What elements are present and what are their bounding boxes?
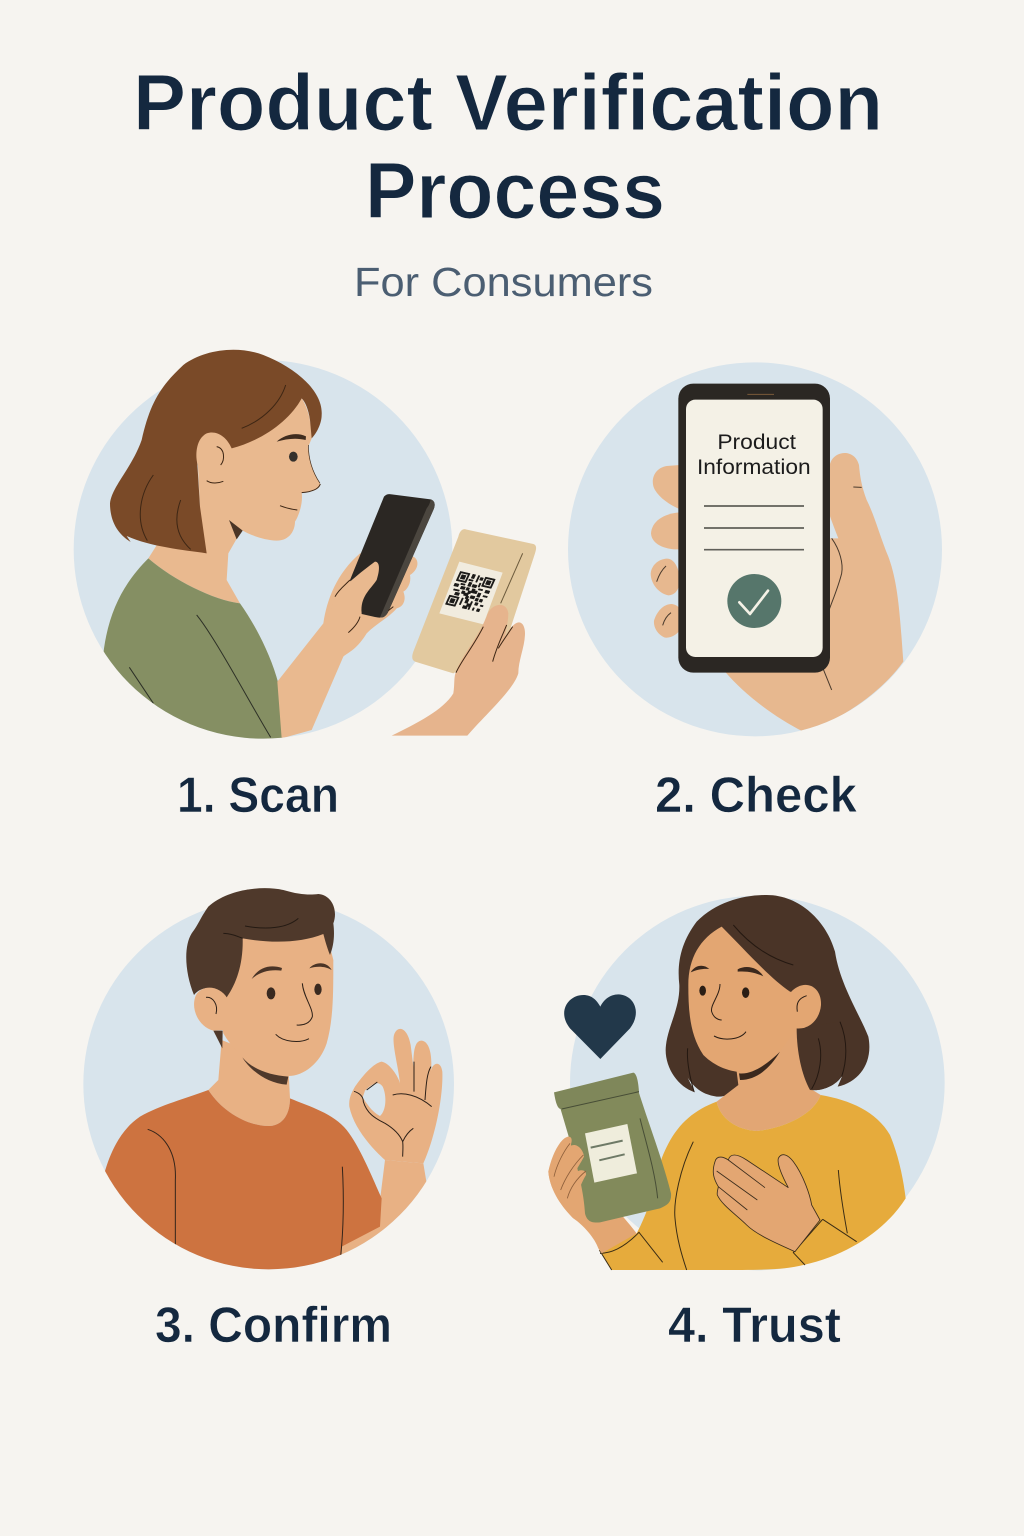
speaker	[747, 393, 774, 396]
product bag	[554, 1073, 671, 1223]
phone	[350, 494, 435, 618]
check badge	[727, 574, 781, 628]
holding hand	[392, 605, 525, 736]
illustration: hand holding phone	[568, 362, 942, 736]
screen heading: Information	[697, 456, 811, 479]
QR label	[439, 562, 503, 624]
phone body	[678, 384, 830, 673]
ear	[791, 985, 821, 1028]
chin shadow	[229, 520, 243, 539]
holding fingers	[548, 1137, 586, 1218]
screen heading	[697, 431, 811, 479]
illustration: woman holding product bag	[548, 895, 945, 1270]
background circle	[568, 362, 942, 736]
hair strands over neck	[797, 1022, 846, 1090]
forearm and hand	[277, 553, 417, 738]
subtitle: For Consumers	[354, 259, 653, 305]
ear	[196, 432, 232, 482]
neck	[208, 1040, 290, 1126]
t-shirt	[100, 1090, 382, 1280]
title: Process	[365, 146, 665, 235]
screen	[686, 400, 823, 657]
hair	[186, 888, 335, 997]
left fingers	[651, 465, 683, 638]
woman's neck and face	[148, 398, 320, 603]
step 3 label: 3. Confirm	[155, 1297, 392, 1353]
face features	[252, 963, 332, 1041]
background circle	[83, 899, 454, 1269]
step 4 label: 4. Trust	[668, 1297, 841, 1353]
chin shadow	[242, 1057, 288, 1085]
face details	[277, 434, 320, 510]
shirt seams	[129, 615, 271, 737]
title: Product Verification	[133, 58, 883, 147]
panel: step 2 check	[568, 362, 942, 736]
neck shadow	[213, 1031, 223, 1048]
left hand	[548, 1137, 637, 1253]
screen heading: Product	[717, 431, 796, 454]
illustration: woman scanning a QR code	[74, 350, 536, 743]
bag label	[585, 1124, 637, 1183]
shirt seams	[148, 1129, 343, 1257]
face features	[691, 966, 763, 1039]
step 2 label: 2. Check	[655, 767, 857, 823]
background circle	[74, 360, 452, 739]
hair strands	[140, 385, 286, 549]
sweater	[599, 1095, 906, 1270]
illustration: man making OK gesture	[83, 888, 454, 1280]
title	[133, 58, 883, 235]
finger creases	[657, 487, 862, 690]
arm	[332, 1160, 426, 1258]
OK hand	[349, 1029, 442, 1163]
face	[217, 933, 333, 1076]
face	[688, 927, 797, 1072]
background circle	[570, 896, 945, 1270]
thumb	[327, 562, 379, 633]
hand creases	[354, 1062, 432, 1157]
hand on chest	[713, 1155, 820, 1252]
screen lines	[704, 506, 804, 550]
hair	[110, 350, 322, 553]
ear	[194, 988, 227, 1031]
shirt	[93, 558, 283, 743]
panel: step 4 trust	[548, 895, 945, 1270]
hair	[666, 895, 869, 1097]
hair part line	[733, 925, 793, 965]
QR code	[445, 571, 495, 612]
heart	[564, 994, 636, 1059]
panel: step 3 confirm	[83, 888, 454, 1280]
step 1 label: 1. Scan	[177, 767, 339, 823]
sweater seams	[599, 1142, 857, 1270]
palm and thumb	[725, 453, 903, 732]
neck	[717, 1025, 821, 1131]
chin shadow	[739, 1052, 780, 1080]
OK hand opening	[363, 1083, 385, 1116]
product card	[412, 529, 536, 673]
panel: step 1 scan	[74, 350, 536, 743]
